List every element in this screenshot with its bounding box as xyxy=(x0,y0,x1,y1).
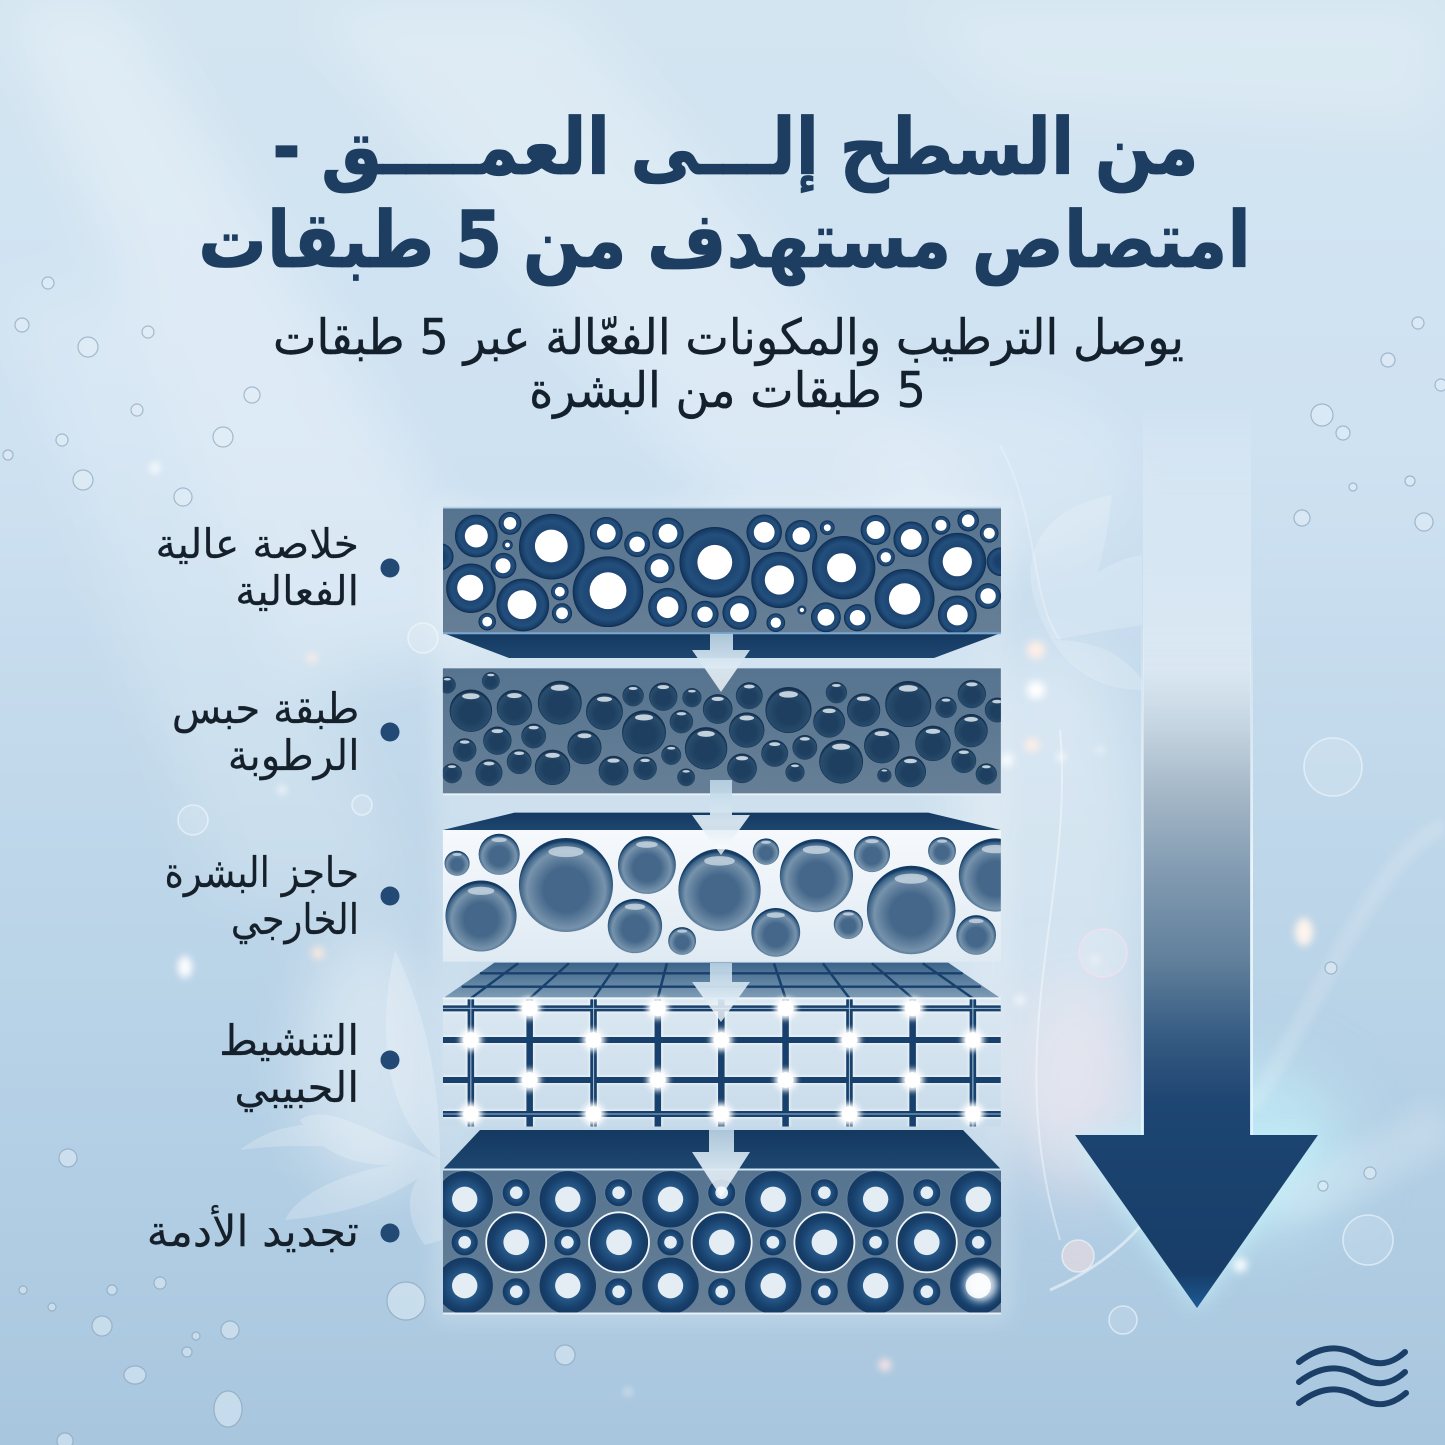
layer 4: granular activation grid xyxy=(443,963,1001,1127)
subtitle line 2: 5 طبقات من البشرة xyxy=(529,362,926,419)
label: moisture-lock layer: طبقة حبس xyxy=(171,684,359,733)
label: high-potency serum: الفعالية xyxy=(235,567,359,615)
flower: right side xyxy=(1031,495,1142,690)
big downward arrow xyxy=(1075,410,1318,1308)
bokeh sparkles xyxy=(150,463,1313,1395)
title line 2: امتصاص مستهدف من 5 طبقات xyxy=(198,196,1251,286)
flower: lower left xyxy=(240,950,442,1245)
subtitle line 1: يوصل الترطيب والمكونات الفعّالة عبر 5 طبقات xyxy=(273,309,1184,366)
label: high-potency serum xyxy=(156,520,359,615)
layer 3: outer skin barrier xyxy=(443,813,1032,962)
label: dermis renewal: تجديد الأدمة xyxy=(147,1207,359,1257)
label: moisture-lock layer: الرطوبة xyxy=(227,731,359,780)
layer 1: high-potency serum xyxy=(427,506,1015,658)
label: granular activation: الحبيبي xyxy=(234,1063,359,1112)
background: swirling ribbons xyxy=(1000,445,1445,1290)
label bullets xyxy=(380,558,400,1242)
title line 1: من السطح إلـــى العمــــق - xyxy=(272,103,1199,193)
water droplets and bubbles xyxy=(178,623,1393,1334)
label: granular activation: التنشيط xyxy=(219,1016,359,1065)
arrows between layers xyxy=(692,634,750,1197)
layer 5: dermis renewal xyxy=(436,1130,1007,1314)
label: outer skin barrier xyxy=(164,848,359,945)
label: outer skin barrier: حاجز البشرة xyxy=(164,848,359,897)
label: outer skin barrier: الخارجي xyxy=(231,895,359,944)
layer 2: moisture-lock layer xyxy=(439,668,1009,795)
layer glow backing xyxy=(434,500,1010,1322)
label: high-potency serum: خلاصة عالية xyxy=(156,520,359,568)
label: moisture-lock layer xyxy=(171,684,359,780)
big arrow glow xyxy=(1075,1135,1318,1308)
label: granular activation xyxy=(219,1016,359,1112)
logo: three waves xyxy=(1299,1348,1406,1404)
